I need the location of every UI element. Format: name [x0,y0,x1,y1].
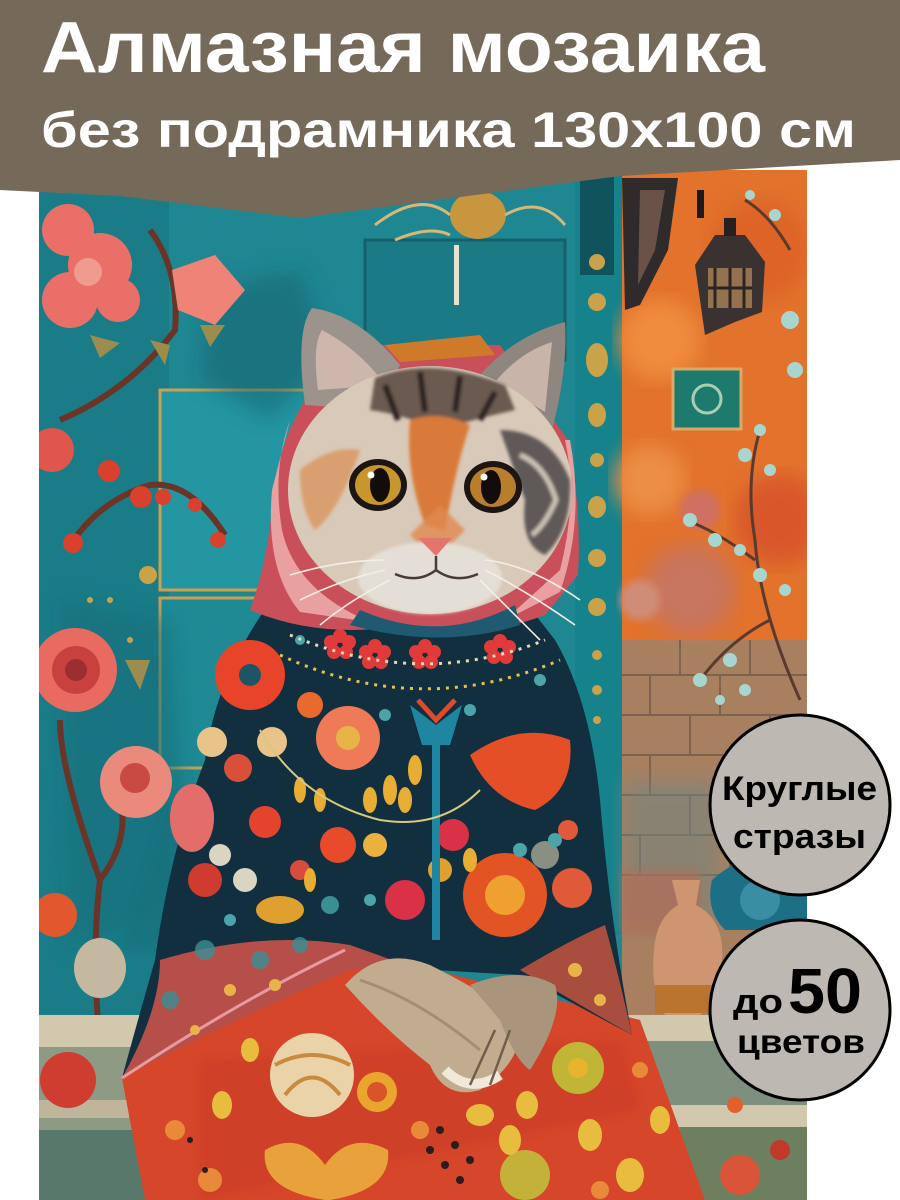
title line 2: без подрамника 130х100 см [41,102,856,158]
whiskers [290,560,580,640]
headscarf [250,335,579,638]
header banner [0,0,900,218]
cat eyes [349,459,522,513]
badge: round rhinestones [710,715,890,895]
shawl floral pattern [161,629,606,1035]
badge text line 2: стразы [733,818,866,856]
cat nose and mouth [395,538,478,578]
badge text: цветов: цветов [737,1023,865,1060]
badge text: до: до [733,983,783,1021]
badge text line 1: Круглые [722,770,877,808]
blossom branches right [683,190,803,705]
teal door background [39,170,624,1030]
floor and pot [39,854,810,1200]
title line 1: Алмазная мозаика [41,8,766,88]
cat paws [345,958,557,1092]
orange wall [615,170,825,1040]
shawl [122,595,632,1078]
badge number 50: 50 [788,955,862,1027]
cat head [288,366,580,640]
pink flowers left [39,204,245,1015]
hanging lantern [622,178,765,335]
badge: up to 50 colours [710,920,890,1100]
green wall tile [673,369,741,429]
cat ears [301,308,565,430]
illustration: cat in a shawl [30,170,825,1200]
skirt [122,950,705,1200]
